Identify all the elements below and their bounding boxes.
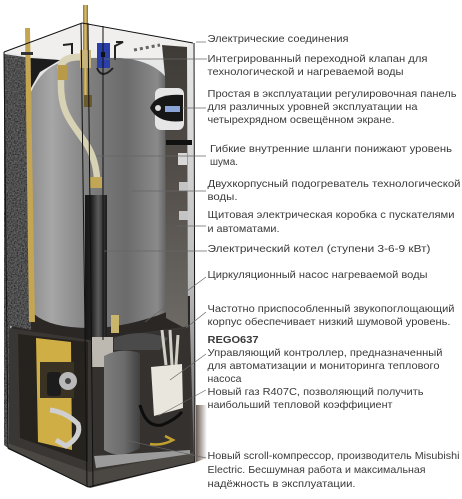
floor shadow — [196, 405, 207, 462]
switches on electrical box — [166, 140, 192, 220]
white bracket — [92, 337, 113, 367]
caption: electrical box: Щитовая электрическая коробка с пускателями — [208, 209, 455, 221]
caption: electrical box — [208, 209, 455, 235]
dark gap below tank — [10, 296, 190, 345]
hot water tank — [31, 58, 167, 328]
caption: twin-shell heater: Двухкорпусный подогреватель технологической — [208, 178, 461, 190]
caption: flexible hoses — [210, 143, 453, 168]
caption: soundproof casing — [208, 303, 455, 328]
caption: scroll compressor: надёжность в эксплуатации. — [208, 478, 356, 490]
left insulation wall — [4, 54, 31, 448]
caption: twin-shell heater — [208, 178, 461, 203]
right column — [162, 45, 188, 330]
caption: integrated valve: Интегрированный переходной клапан для — [208, 53, 428, 65]
base tray — [8, 444, 195, 488]
black vertical cylinder — [85, 195, 107, 340]
pipe coil — [50, 410, 79, 446]
caption: integrated valve: технологической и нагреваемой воды — [208, 66, 404, 78]
caption: control panel: четырехрядном освещённом экране. — [208, 114, 394, 126]
caption: scroll compressor — [208, 450, 460, 490]
inner dark shadow top — [31, 58, 60, 88]
caption: REGO637 controller — [208, 334, 443, 385]
wires — [162, 330, 178, 365]
illustration: heat pump unit — [4, 5, 207, 488]
caption: control panel: для различных уровней эксплуатации на — [208, 101, 418, 113]
soundproof casing inner — [18, 334, 88, 462]
top cover — [4, 23, 192, 60]
caption: REGO637 controller: REGO637 — [208, 334, 259, 346]
leader lines — [96, 42, 207, 458]
caption: REGO637 controller: Управляющий контроллер, предназначенный — [208, 347, 443, 359]
compressor compartment — [92, 328, 190, 460]
lower compartment dark frame — [9, 326, 194, 482]
caption: soundproof casing: Частотно приспособленный звукопоглощающий — [208, 303, 455, 315]
brass fitting above compressor — [111, 315, 119, 333]
pipe flange — [21, 52, 33, 55]
yellow insulation — [36, 338, 72, 450]
caption: twin-shell heater: воды. — [208, 191, 238, 203]
white controller box — [151, 364, 183, 416]
circulation pump — [47, 372, 77, 396]
caption: REGO637 controller: насоса — [208, 373, 242, 385]
flexible hose — [61, 80, 97, 178]
caption: R407C gas — [208, 386, 424, 411]
caption: REGO637 controller: для автоматизации и мониторинга теплового — [208, 360, 440, 372]
caption: R407C gas: Новый газ R407C, позволяющий получить — [208, 386, 424, 398]
interior background — [4, 23, 195, 487]
caption: electrical connections: Электрические соединения — [208, 33, 348, 45]
caption: circulation pump: Циркуляционный насос нагреваемой воды — [208, 269, 428, 281]
caption: control panel — [208, 88, 457, 126]
caption: flexible hoses: шума. — [210, 156, 238, 168]
blue valve — [63, 42, 160, 74]
pump recess — [40, 362, 74, 398]
caption: soundproof casing: корпус обеспечивает низкий шумовой уровень. — [208, 316, 450, 328]
caption: control panel: Простая в эксплуатации регулировочная панель — [208, 88, 457, 100]
brass pipe: centre — [61, 5, 92, 107]
brass pipe: left — [25, 28, 35, 322]
compressor — [104, 333, 168, 455]
caption: electrical box: и автоматами. — [208, 223, 280, 235]
control panel — [150, 88, 184, 130]
caption: flexible hoses: Гибкие внутренние шланги понижают уровень — [210, 143, 453, 155]
cables and brass valve — [140, 405, 182, 444]
hose fittings — [58, 65, 102, 188]
caption: R407C gas: наибольший тепловой коэффициент — [208, 399, 393, 411]
caption: scroll compressor: Electric. Бесшумная работа и максимальная — [208, 464, 426, 476]
caption: integrated valve — [208, 53, 428, 78]
caption: scroll compressor: Новый scroll-компрессор, производитель Misubishi — [208, 450, 460, 462]
outer frame edges — [4, 23, 195, 487]
caption: electric boiler: Электрический котел (ступени 3-6-9 кВт) — [208, 243, 430, 255]
